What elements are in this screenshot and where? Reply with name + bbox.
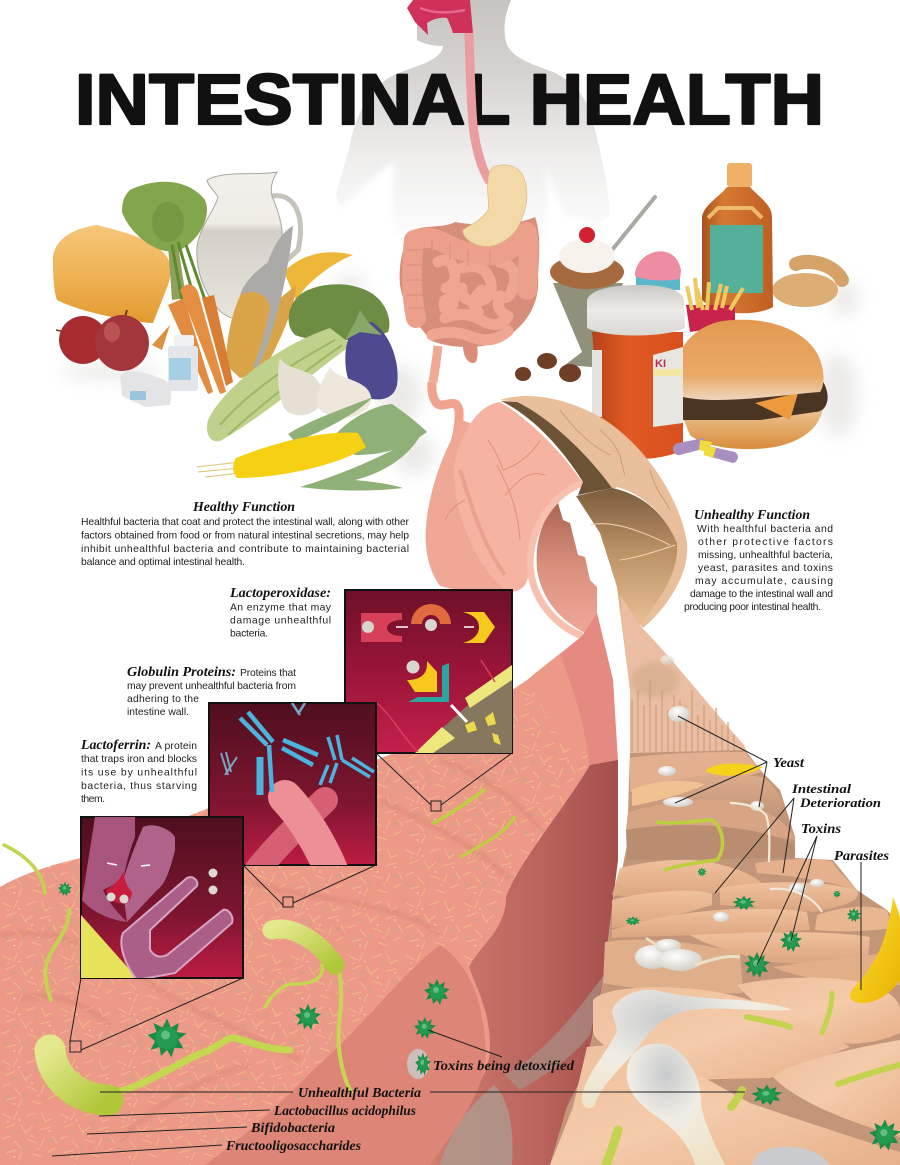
text block: globulin proteins: may prevent unhealthful bacteria from — [127, 681, 296, 692]
inset: antibodies — [221, 703, 374, 795]
text block: healthy function: inhibit unhealthful bacteria and contribute to maintaining bacterial — [81, 544, 409, 555]
white yeast cells and strands — [582, 655, 830, 1165]
inset: lactoferrin lobes — [82, 817, 135, 922]
food: corn — [233, 432, 366, 478]
food: corn husks — [288, 397, 427, 491]
text block: lactoferrin: that traps iron and blocks — [81, 754, 197, 765]
inset: yellow shape — [463, 612, 495, 643]
food: corn silk — [197, 462, 240, 477]
text block: lactoferrin: bacteria, thus starving — [81, 781, 197, 792]
label: unhealthful bacteria: Unhealthful Bacteria — [298, 1085, 421, 1100]
food: pill bottle: KI — [655, 358, 666, 370]
label: toxins: Toxins — [801, 821, 841, 836]
inset: red receptor — [361, 613, 402, 642]
food: cheese loaf — [53, 225, 170, 323]
text block: unhealthy function: other protective factors — [698, 537, 833, 548]
yeast: bottom bud — [752, 1147, 830, 1165]
text block: unhealthy function — [684, 507, 833, 613]
inset panel: lactoferrin — [81, 817, 243, 980]
food: carrots — [152, 242, 233, 394]
text block: lactoferrin: its use by unhealthful — [81, 768, 197, 778]
yeast: large branching cell — [582, 990, 792, 1108]
food: cheese — [755, 393, 798, 420]
food: metal scoop — [240, 226, 293, 368]
title: INTESTINAL HEALTH — [75, 61, 824, 140]
bacteria — [4, 790, 900, 1165]
smooth lobe — [205, 945, 486, 1165]
label: intestinal deterioration — [791, 781, 881, 810]
grey patches — [440, 1085, 512, 1165]
inset panel: lactoperoxidase — [345, 590, 512, 753]
label: lactobacillus acidophilus: Lactobacillus acidophilus — [273, 1103, 416, 1118]
text block: lactoperoxidase: An enzyme that may — [230, 602, 332, 614]
text block: lactoferrin: Lactoferrin: — [80, 737, 151, 752]
colon: outer tan band — [500, 396, 687, 628]
text block: healthy function: factors obtained from food or from natural intestinal secretions, may help — [81, 530, 409, 542]
unhealthy intestinal wall — [550, 750, 900, 1165]
food: capsules — [673, 438, 738, 463]
text block: unhealthy function: yeast, parasites and toxins — [698, 563, 833, 574]
wall folds — [0, 760, 540, 1140]
text block: globulin proteins — [127, 664, 296, 718]
inset: crossed bacteria — [250, 800, 325, 880]
text block: lactoperoxidase: Lactoperoxidase: — [229, 585, 331, 600]
food: carton — [120, 371, 171, 407]
text block: unhealthy function: With healthful bacteria and — [697, 524, 833, 535]
text block: unhealthy function: may accumulate, causing — [695, 576, 833, 587]
inset panel: globulin proteins — [209, 703, 376, 880]
label: fructooligosaccharides: Fructooligosaccharides — [225, 1138, 361, 1153]
deep fold band — [429, 760, 618, 1165]
bacteria: small — [433, 790, 484, 823]
yeast: yellow cell — [705, 764, 763, 776]
intestines — [400, 217, 539, 382]
text block: healthy function: balance and optimal intestinal health. — [81, 557, 245, 568]
arm gaps — [333, 160, 397, 250]
food: leafy greens — [122, 182, 207, 300]
text block: lactoperoxidase — [229, 585, 332, 640]
food: pastries — [772, 262, 842, 307]
inset: orange arc — [411, 604, 451, 624]
large intestine frame — [412, 232, 529, 318]
lower large cells — [737, 978, 900, 1044]
ground shadows under foods — [60, 273, 859, 475]
text block: lactoferrin: them. — [81, 794, 105, 805]
text block: lactoperoxidase: damage unhealthful — [230, 616, 331, 626]
inset: yellow bacterium — [81, 915, 137, 978]
unhealthy foods group — [515, 163, 842, 463]
food: eggplant — [345, 310, 398, 399]
middle cells — [612, 860, 762, 897]
label: toxins being detoxified: Toxins being detoxified — [433, 1058, 574, 1073]
text block: lactoperoxidase: bacteria. — [230, 628, 268, 640]
healthy intestinal wall — [0, 613, 618, 1165]
text block: unhealthy function: producing poor intestinal health. — [684, 602, 821, 613]
inset: open lobe — [121, 877, 232, 980]
parasite — [850, 897, 900, 1003]
colon: front rim — [530, 483, 583, 636]
label: yeast: Yeast — [773, 755, 805, 770]
inset: iron particles — [208, 868, 218, 878]
food: pill bottle — [587, 285, 685, 459]
stomach — [463, 165, 527, 246]
mouth and throat — [407, 0, 473, 35]
food: second broccoli — [289, 284, 389, 341]
text block: healthy function — [81, 499, 410, 568]
toxins — [58, 867, 900, 1151]
upper block cells — [630, 752, 762, 792]
human body silhouette — [333, 0, 612, 255]
colon: left lobe — [426, 420, 532, 591]
food: garlic — [278, 358, 371, 418]
food: fries — [686, 278, 743, 332]
yeast: large bulb — [627, 1044, 725, 1165]
label: intestinal deterioration: Deterioration — [799, 795, 881, 810]
label: intestinal deterioration: Intestinal — [791, 781, 851, 796]
colon: tan interior — [576, 488, 677, 690]
leader lines: right labels — [675, 716, 861, 990]
text block: healthy function: Healthy Function — [192, 499, 295, 514]
text block: unhealthy function: Unhealthy Function — [694, 507, 810, 522]
label: parasites: Parasites — [834, 848, 889, 863]
text block: globulin proteins: Globulin Proteins: — [127, 664, 236, 679]
villi stream to unhealthy wall — [620, 595, 750, 762]
inset connector lines — [70, 753, 512, 1052]
food: burger bottom bun — [683, 400, 823, 449]
label: bifidobacteria: Bifidobacteria — [250, 1120, 335, 1135]
food: milk jug — [197, 172, 301, 319]
esophagus — [469, 33, 490, 182]
text block: unhealthy function: damage to the intestinal wall and — [690, 589, 833, 600]
text block: unhealthy function: missing, unhealthful bacteria, — [698, 550, 833, 561]
food: chocolates — [515, 353, 581, 382]
leader lines: bottom labels — [52, 1030, 745, 1156]
food: cupcake — [635, 251, 681, 290]
food: burger top bun — [683, 320, 824, 400]
colon: dark slit — [501, 401, 612, 495]
colon: pink interior — [537, 503, 597, 633]
text block: globulin proteins: adhering to the — [127, 694, 199, 705]
small intestine loops — [432, 260, 515, 340]
healthy foods group — [53, 172, 427, 491]
food: sauce bottle — [702, 163, 773, 313]
rectum tube — [432, 382, 459, 465]
bacterium: large lower — [100, 1038, 290, 1095]
text block: lactoferrin — [80, 737, 197, 805]
food: grain — [226, 285, 296, 378]
upper stream band — [560, 613, 618, 770]
text block: globulin proteins: Proteins that — [240, 668, 296, 679]
yeast: cluster — [635, 938, 740, 971]
text block: lactoferrin: A protein — [155, 741, 197, 752]
food: apples — [56, 310, 149, 371]
food: banana — [284, 252, 353, 300]
bacterium: upper with head — [326, 945, 351, 1092]
inset: gray bacterium wall — [415, 665, 512, 753]
food: celery — [207, 328, 352, 441]
text block: healthy function: Healthful bacteria that coat and protect the intestinal wall, along with other — [81, 517, 410, 528]
food: vitamin bottle — [168, 335, 198, 391]
food: burger patty — [683, 380, 828, 420]
large colon with cut open end — [426, 396, 687, 690]
colon: main lobe — [454, 402, 583, 592]
text block: globulin proteins: intestine wall. — [127, 707, 189, 718]
food: sundae — [550, 197, 655, 367]
